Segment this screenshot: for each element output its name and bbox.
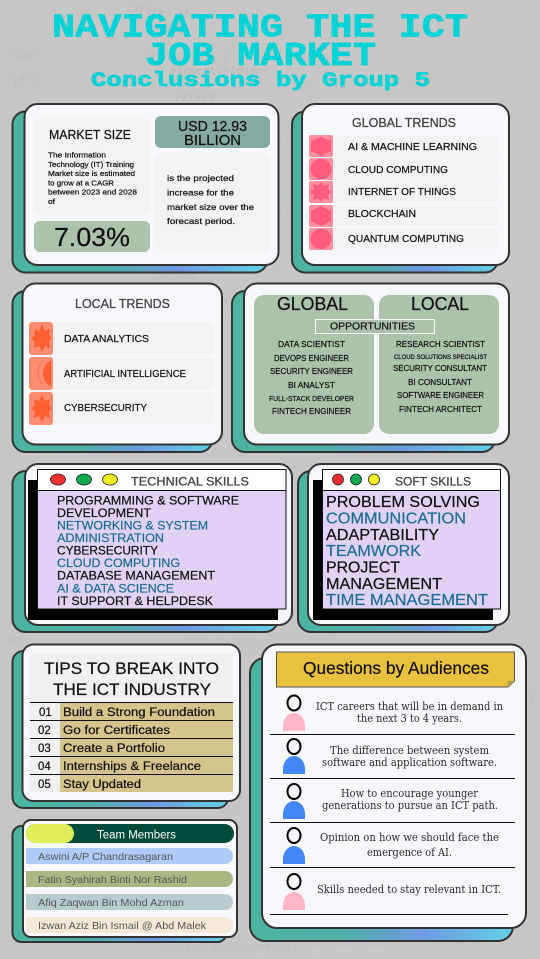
projected increase description card: market size over the bbox=[167, 202, 254, 212]
tips heading: THE ICT INDUSTRY bbox=[53, 681, 211, 699]
background: faint code texture: options bbox=[150, 272, 196, 284]
column: local opportunities: LOCAL bbox=[411, 294, 469, 314]
window title bar bbox=[38, 470, 286, 490]
trend: quantum computing: QUANTUM COMPUTING bbox=[348, 233, 464, 245]
column: local opportunities: RESEARCH SCIENTIST bbox=[396, 339, 485, 349]
window title bar: SOFT SKILLS bbox=[395, 474, 471, 488]
market size description card bbox=[34, 117, 150, 216]
panel: market size bbox=[12, 104, 278, 272]
soft skills list: PROBLEM SOLVING bbox=[326, 494, 480, 511]
question 4 bbox=[283, 828, 499, 864]
trend: quantum computing bbox=[309, 228, 499, 250]
projected increase figure: BILLION bbox=[184, 133, 241, 149]
title: NAVIGATING THE ICT bbox=[52, 10, 468, 46]
technical skills list: ADMINISTRATION bbox=[57, 531, 164, 545]
background: faint code texture: ( bbox=[245, 892, 252, 904]
tips table: Build a Strong Foundation bbox=[63, 707, 215, 719]
column: global opportunities: DATA SCIENTIST bbox=[278, 339, 345, 349]
soft skills list: COMMUNICATION bbox=[326, 510, 466, 528]
background: faint code texture: : bbox=[281, 207, 288, 219]
projected increase description card bbox=[155, 153, 270, 252]
background: faint code texture: + + bbox=[222, 442, 242, 454]
column: global opportunities: FINTECH ENGINEER bbox=[272, 406, 351, 416]
column: global opportunities: FULL-STACK DEVELOPER bbox=[269, 394, 355, 403]
trend: AI and machine learning: AI & MACHINE LEARNING bbox=[348, 141, 477, 153]
column: global opportunities: DEVOPS ENGINEER bbox=[274, 353, 349, 363]
soft skills list: TEAMWORK bbox=[326, 543, 422, 560]
market size description card: Market size is estimated bbox=[48, 169, 135, 178]
technical skills list: CLOUD COMPUTING bbox=[57, 556, 180, 570]
tips table: 01 bbox=[39, 707, 52, 719]
technical skills list: DATABASE MANAGEMENT bbox=[57, 568, 216, 582]
member: Afiq: Afiq Zaqwan Bin Mohd Azman bbox=[38, 897, 184, 909]
background: faint code texture: element.hidden bbox=[170, 66, 262, 78]
panel: local trends bbox=[12, 284, 222, 452]
background: faint code texture: //fires the bbox=[125, 4, 198, 24]
background: faint code texture: //kind the modified bbox=[165, 944, 290, 956]
background: faint code texture: at bbox=[10, 635, 23, 647]
soft skills list: ADAPTABILITY bbox=[326, 527, 439, 544]
questions heading banner bbox=[276, 652, 514, 687]
question 3: How to encourage younger bbox=[341, 787, 479, 800]
background: faint code texture: var i bbox=[210, 810, 243, 822]
tips table: 04 bbox=[38, 761, 51, 773]
trend: data analytics: DATA ANALYTICS bbox=[64, 333, 149, 345]
trend: data analytics bbox=[29, 322, 214, 355]
projected increase figure bbox=[155, 116, 270, 149]
technical skills list: PROGRAMMING & SOFTWARE bbox=[57, 494, 239, 508]
question 1 bbox=[283, 696, 503, 731]
member: Izwan: Izwan Aziz Bin Ismail @ Abd Malek bbox=[38, 920, 207, 932]
CAGR figure bbox=[34, 221, 150, 252]
panel: soft skills bbox=[298, 464, 509, 632]
projected increase description card: is the projected bbox=[167, 173, 234, 183]
soft skills list bbox=[322, 490, 500, 609]
team members header bbox=[26, 824, 234, 843]
global trends heading: GLOBAL TRENDS bbox=[352, 115, 456, 130]
trend: artificial intelligence: ARTIFICIAL INTELLIGENCE bbox=[64, 369, 186, 380]
soft skills list: TIME MANAGEMENT bbox=[326, 592, 489, 609]
tips table: Stay Updated bbox=[63, 779, 141, 791]
background: faint code texture: one) t.one( settings.data, .. bbox=[255, 947, 446, 959]
column: local opportunities: BI CONSULTANT bbox=[408, 377, 472, 387]
opportunities label: OPPORTUNITIES bbox=[330, 322, 415, 332]
projected increase description card: increase for the bbox=[167, 188, 234, 198]
window title bar bbox=[322, 470, 500, 490]
trend: internet of things: INTERNET OF THINGS bbox=[348, 186, 456, 198]
question 2: The difference between system bbox=[330, 744, 489, 757]
tips table: Go for Certificates bbox=[63, 725, 170, 737]
question 2 bbox=[283, 739, 497, 774]
title: JOB MARKET bbox=[145, 38, 376, 75]
window shadow bbox=[313, 480, 493, 620]
opportunities label bbox=[316, 320, 434, 334]
question 5 bbox=[283, 874, 501, 910]
background: faint code texture: e bbox=[281, 190, 288, 202]
background: faint code texture: change bbox=[150, 24, 190, 36]
question 5: Skills needed to stay relevant in ICT. bbox=[317, 883, 501, 896]
market size description card: MARKET SIZE bbox=[49, 128, 131, 142]
panel: tips bbox=[12, 644, 240, 808]
subtitle: Conclusions by Group 5 bbox=[91, 70, 430, 93]
title bbox=[52, 10, 468, 75]
market size description card: to grow at a CAGR bbox=[48, 178, 114, 188]
background: faint code texture: t bbox=[228, 357, 235, 369]
question 2: software and application software. bbox=[322, 756, 497, 769]
background: faint code texture: //create a modified fn with bbox=[158, 632, 336, 644]
tips table: 05 bbox=[38, 779, 51, 791]
trend: cybersecurity: CYBERSECURITY bbox=[64, 402, 147, 414]
member: Aswini bbox=[26, 848, 233, 864]
member: Fatin: Fatin Syahirah Binti Nor Rashid bbox=[38, 874, 187, 886]
technical skills list: DEVELOPMENT bbox=[57, 506, 152, 520]
column: global opportunities bbox=[254, 294, 374, 434]
background: faint code texture: //last bbox=[175, 93, 215, 105]
background: faint code texture: var bbox=[15, 52, 35, 64]
projected increase description card: forecast period. bbox=[167, 216, 235, 226]
trend: cloud computing bbox=[309, 158, 499, 180]
technical skills list bbox=[38, 490, 286, 609]
background: faint code texture: ction = this; bbox=[185, 644, 271, 656]
tips heading bbox=[30, 653, 233, 702]
trend: cybersecurity bbox=[29, 392, 214, 425]
panel: opportunities bbox=[232, 284, 509, 452]
market size description card: between 2023 and 2028 bbox=[48, 188, 137, 196]
background: faint code texture: : bbox=[281, 134, 288, 146]
column: global opportunities: GLOBAL bbox=[277, 294, 348, 314]
tips heading: TIPS TO BREAK INTO bbox=[44, 660, 219, 678]
question 1: ICT careers that will be in demand in bbox=[316, 700, 503, 713]
panel: team members bbox=[12, 820, 237, 942]
technical skills list: AI & DATA SCIENCE bbox=[57, 582, 174, 596]
column: local opportunities: CLOUD SOLUTIONS SPECIALIST bbox=[394, 355, 487, 361]
panel: technical skills bbox=[12, 464, 292, 632]
team members header: Team Members bbox=[97, 830, 176, 842]
question 3: generations to pursue an ICT path. bbox=[322, 799, 498, 812]
panel: questions by audiences bbox=[250, 644, 526, 941]
question 3 bbox=[283, 784, 498, 819]
window title bar: TECHNICAL SKILLS bbox=[131, 474, 249, 488]
column: local opportunities bbox=[379, 294, 499, 434]
trend: cloud computing: CLOUD COMPUTING bbox=[348, 164, 448, 176]
question 1: the next 3 to 4 years. bbox=[357, 712, 462, 725]
background: faint code texture: t bbox=[228, 312, 235, 324]
trend: blockchain: BLOCKCHAIN bbox=[348, 208, 416, 220]
market size description card: of bbox=[48, 197, 56, 206]
column: local opportunities: SOFTWARE ENGINEER bbox=[397, 390, 484, 400]
background: faint code texture: each bbox=[245, 682, 271, 694]
background: faint code texture: { bbox=[528, 692, 535, 704]
question 4: emergence of AI. bbox=[367, 846, 452, 859]
trend: AI and machine learning bbox=[309, 135, 499, 157]
tips table: 02 bbox=[38, 725, 51, 737]
market size description card: The Information bbox=[48, 150, 106, 160]
soft skills list: MANAGEMENT bbox=[326, 576, 443, 593]
local trends heading: LOCAL TRENDS bbox=[75, 296, 170, 311]
member: Aswini: Aswini A/P Chandrasagaran bbox=[38, 851, 173, 863]
trend: internet of things bbox=[309, 181, 499, 203]
market size description card: Technology (IT) Training bbox=[48, 160, 134, 169]
projected increase figure: USD 12.93 bbox=[178, 119, 247, 135]
column: global opportunities: SECURITY ENGINEER bbox=[270, 366, 353, 376]
tips table: Create a Portfolio bbox=[63, 743, 165, 755]
member: Izwan bbox=[26, 917, 233, 933]
member: Fatin bbox=[26, 871, 233, 887]
tips table: 03 bbox=[38, 743, 51, 755]
window shadow bbox=[28, 480, 278, 620]
tips table: Internships & Freelance bbox=[63, 761, 201, 773]
soft skills list: PROJECT bbox=[326, 560, 401, 576]
background: faint code texture: if ( bbox=[12, 77, 38, 89]
trend: blockchain bbox=[309, 205, 499, 227]
background: faint code texture: in bbox=[245, 727, 258, 739]
CAGR figure: 7.03% bbox=[54, 222, 130, 252]
column: global opportunities: BI ANALYST bbox=[288, 380, 335, 390]
tips table bbox=[30, 702, 233, 792]
column: local opportunities: SECURITY CONSULTANT bbox=[393, 363, 487, 373]
panel: global trends bbox=[292, 104, 509, 272]
member: Afiq bbox=[26, 894, 233, 910]
question 4: Opinion on how we should face the bbox=[320, 831, 499, 844]
background: faint code texture: function() { bbox=[150, 52, 229, 64]
technical skills list: IT SUPPORT & HELPDESK bbox=[57, 594, 213, 608]
column: local opportunities: FINTECH ARCHITECT bbox=[399, 404, 482, 414]
technical skills list: NETWORKING & SYSTEM bbox=[57, 518, 208, 532]
technical skills list: CYBERSECURITY bbox=[57, 544, 158, 558]
trend: artificial intelligence bbox=[29, 357, 214, 390]
questions heading banner: Questions by Audiences bbox=[303, 658, 489, 678]
